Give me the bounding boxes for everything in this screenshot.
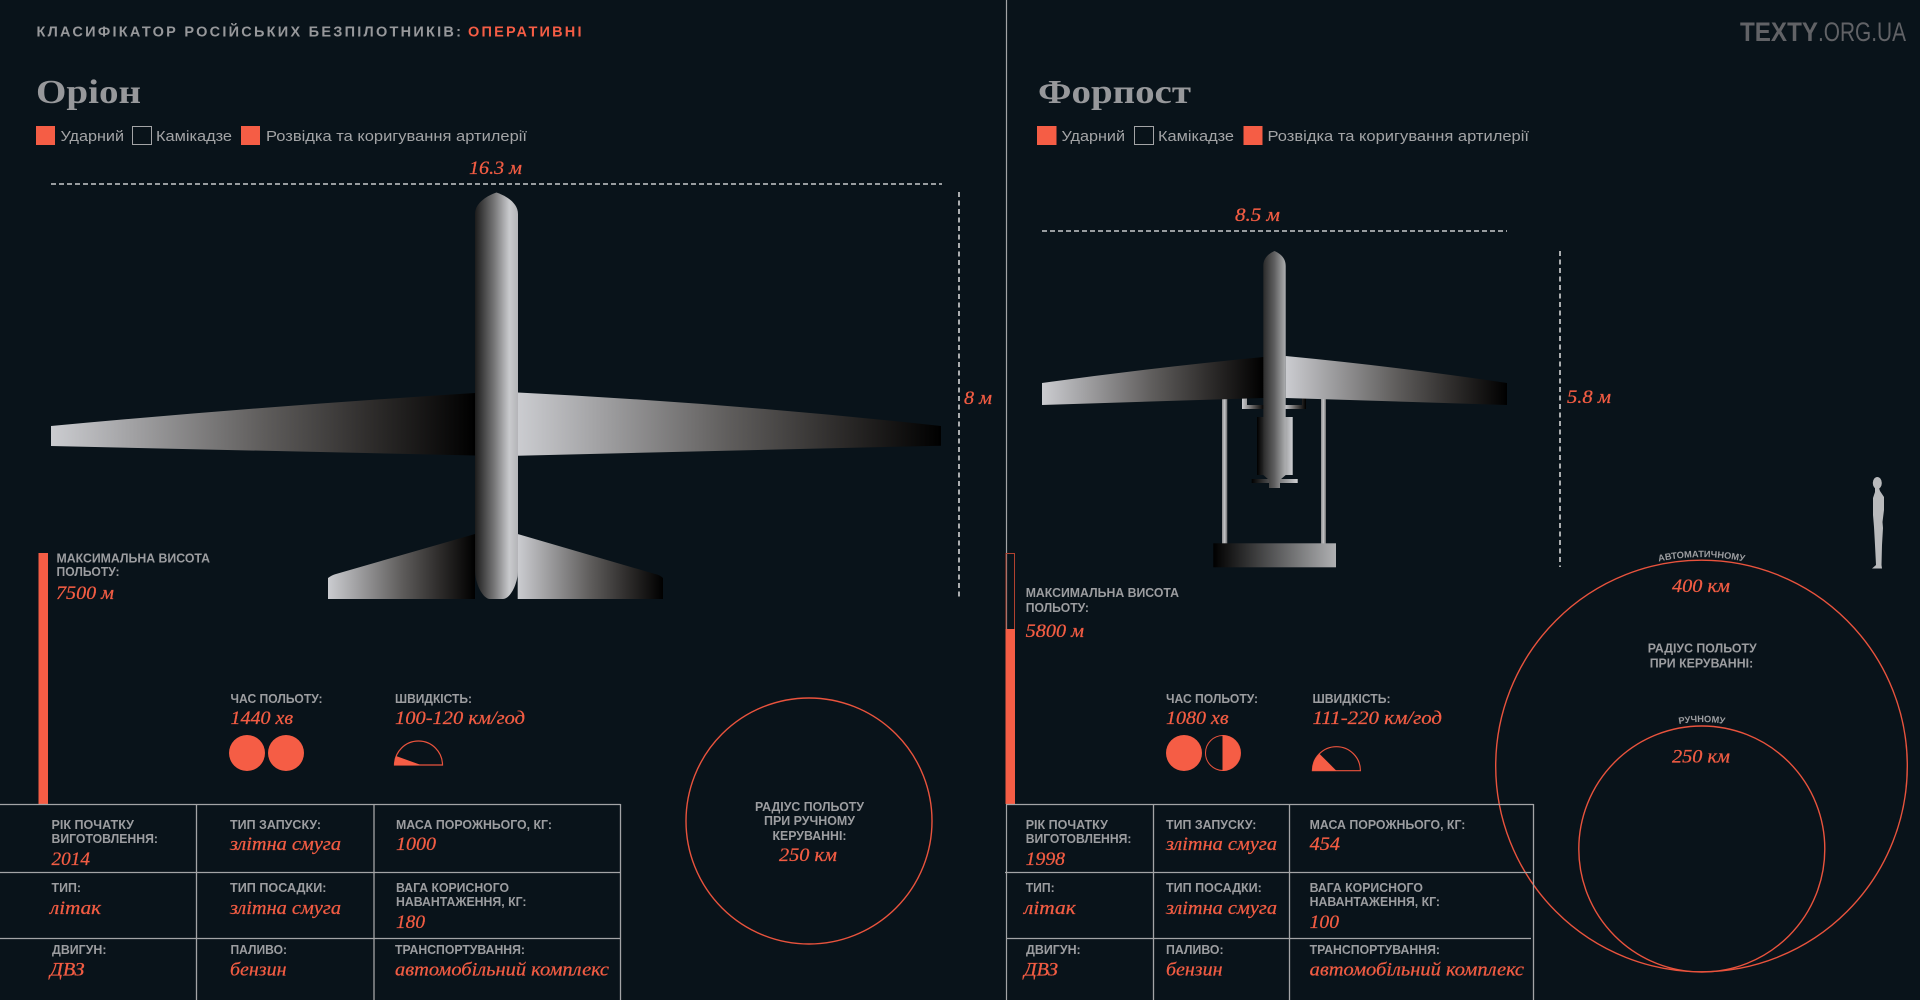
legend: Orion roles: Розвідка та коригування артилерії [266,128,528,145]
speed: 100-120 km/h with gauge: ШВИДКІСТЬ: [395,692,472,706]
spec: engine: ДВИГУН: [52,943,106,957]
length dimension: 5.8 m: 5.8 м [1567,387,1611,408]
spec: engine: ДВИГУН: [1026,943,1081,957]
spec: engine: ДВЗ [48,960,84,980]
flight time: 1080 min with one and a half circles: 1080 хв [1166,708,1228,729]
drone: Forpost top view [1042,251,1507,567]
spec: production start year: РІК ПОЧАТКУ [1026,818,1108,832]
spec: transport: автомобільний комплекс [395,960,610,980]
legend: Orion roles [36,126,528,145]
wingspan dimension: 16.3 m: 16.3 м [469,158,522,179]
spec: type [49,881,102,919]
title [36,22,582,40]
length dimension: 8 m: 8 м [964,388,992,409]
spec: engine: ДВЗ [1022,960,1058,980]
spec: launch type: злітна смуга [229,834,341,855]
title: ОПЕРАТИВНІ [468,24,582,40]
spec: empty mass [1310,818,1465,855]
spec: landing type: злітна смуга [1165,898,1277,919]
flight time: 1080 min with one and a half circles: ЧАС ПОЛЬОТУ: [1166,692,1258,706]
flight time: 1440 min with two filled day circles [229,692,322,771]
spec: transport: ТРАНСПОРТУВАННЯ: [395,943,525,957]
spec: empty mass: 1000 [396,834,437,855]
speed: 111-220 km/h with gauge: 111-220 км/год [1312,708,1442,729]
legend: Orion roles: Камікадзе [156,128,232,145]
flight time: 1080 min with one and a half circles [1166,692,1258,771]
specification table: Orion [0,804,620,1000]
drone: Orion top view [51,192,941,599]
flight radius circles: automatic 400 km and manual 250 km: ПРИ КЕРУВАННІ: [1650,656,1753,670]
spec: landing type [1165,881,1277,919]
spec: landing type: ТИП ПОСАДКИ: [1166,881,1262,895]
flight radius circles: automatic 400 km and manual 250 km: 250 км [1672,746,1730,768]
spec: payload: 180 [396,912,426,933]
title: КЛАСИФІКАТОР РОСІЙСЬКИХ БЕЗПІЛОТНИКІВ: [36,22,461,40]
spec: transport: автомобільний комплекс [1310,960,1525,980]
altitude bar and label: 7500 m [38,552,210,804]
spec: type: літак [1023,898,1077,919]
spec: launch type [1165,818,1277,855]
spec: engine [48,943,106,980]
flight radius circles: automatic 400 km and manual 250 km: РУЧНОМУ [1678,716,1726,724]
heading: Orion: Оріон [36,74,141,111]
spec: landing type: злітна смуга [229,898,341,919]
spec: type: ТИП: [52,881,81,895]
spec: landing type [229,881,341,919]
spec: payload: НАВАНТАЖЕННЯ, КГ: [396,895,526,909]
speed: 100-120 km/h with gauge: 100-120 км/год [395,708,525,729]
spec: type: ТИП: [1026,881,1055,895]
speed: 111-220 km/h with gauge: ШВИДКІСТЬ: [1312,692,1390,706]
flight time: 1440 min with two filled day circles: ЧАС ПОЛЬОТУ: [230,692,322,706]
spec: production start year: 1998 [1026,849,1066,870]
legend: Forpost roles: Розвідка та коригування артилерії [1268,128,1530,145]
spec: launch type: ТИП ЗАПУСКУ: [1166,818,1256,832]
spec: type [1023,881,1077,919]
logo: texty.org.ua: TEXTY [1740,17,1818,47]
panel: Orion [0,74,992,1000]
altitude bar and label: 5800 m [1006,554,1179,804]
spec: payload: ВАГА КОРИСНОГО [396,881,509,895]
spec: engine [1022,943,1081,980]
altitude bar and label: 5800 m: 5800 м [1026,621,1084,642]
altitude bar and label: 7500 m: МАКСИМАЛЬНА ВИСОТА [56,552,210,566]
spec: fuel: бензин [230,960,286,980]
spec: production start year [52,818,158,870]
spec: fuel: ПАЛИВО: [230,943,287,957]
spec: payload: 100 [1310,912,1340,933]
spec: fuel [230,943,287,980]
spec: type: літак [49,898,102,919]
spec: production start year: ВИГОТОВЛЕННЯ: [1026,832,1131,846]
altitude bar and label: 5800 m: МАКСИМАЛЬНА ВИСОТА [1026,586,1179,600]
spec: transport: ТРАНСПОРТУВАННЯ: [1310,943,1440,957]
spec: transport [1310,943,1525,980]
legend: Orion roles: Ударний [60,128,124,145]
flight radius circle: 250 km: ПРИ РУЧНОМУ [764,814,855,828]
spec: payload [1310,881,1440,933]
legend: Forpost roles: Ударний [1062,128,1125,145]
logo: texty.org.ua [1740,17,1906,47]
spec: fuel: ПАЛИВО: [1166,943,1224,957]
spec: empty mass [396,818,552,855]
flight radius circles: automatic 400 km and manual 250 km: АВТОМАТИЧНОМУ [1658,550,1746,562]
spec: empty mass: МАСА ПОРОЖНЬОГО, КГ: [396,818,552,832]
flight radius circle: 250 km: 250 км [779,845,837,866]
flight radius circles: automatic 400 km and manual 250 km [1495,550,1908,973]
heading: Forpost: Форпост [1038,74,1191,111]
specification table: Forpost [1005,804,1534,1000]
spec: production start year [1026,818,1131,870]
flight radius circle: 250 km [686,698,932,944]
spec: landing type: ТИП ПОСАДКИ: [230,881,326,895]
flight radius circle: 250 km: РАДІУС ПОЛЬОТУ [755,800,864,814]
altitude bar and label: 7500 m: 7500 м [56,583,114,604]
human silhouette scale figure [1872,477,1884,568]
spec: transport [395,943,610,980]
flight time: 1440 min with two filled day circles: 1440 хв [230,708,293,729]
spec: fuel: бензин [1166,960,1222,980]
spec: production start year: ВИГОТОВЛЕННЯ: [52,832,158,846]
spec: launch type: злітна смуга [1165,834,1277,855]
altitude bar and label: 5800 m: ПОЛЬОТУ: [1026,601,1089,615]
legend: Forpost roles [1037,126,1530,145]
spec: payload [396,881,526,933]
legend: Forpost roles: Камікадзе [1158,128,1234,145]
spec: launch type [229,818,341,855]
spec: production start year: РІК ПОЧАТКУ [52,818,134,832]
speed: 100-120 km/h with gauge [394,692,525,765]
flight radius circle: 250 km: КЕРУВАННІ: [772,829,846,843]
wingspan dimension: 8.5 m: 8.5 м [1235,205,1280,226]
spec: launch type: ТИП ЗАПУСКУ: [230,818,321,832]
altitude bar and label: 7500 m: ПОЛЬОТУ: [56,565,120,579]
flight radius circles: automatic 400 km and manual 250 km: РАДІУС ПОЛЬОТУ [1648,642,1757,656]
spec: empty mass: МАСА ПОРОЖНЬОГО, КГ: [1310,818,1465,832]
flight radius circles: automatic 400 km and manual 250 km: 400 км [1672,576,1730,597]
spec: production start year: 2014 [52,849,91,870]
spec: empty mass: 454 [1310,834,1341,855]
spec: payload: ВАГА КОРИСНОГО [1310,881,1423,895]
panel: Forpost [1005,74,1908,1000]
spec: payload: НАВАНТАЖЕННЯ, КГ: [1310,895,1440,909]
speed: 111-220 km/h with gauge [1312,692,1442,771]
spec: fuel [1166,943,1224,980]
